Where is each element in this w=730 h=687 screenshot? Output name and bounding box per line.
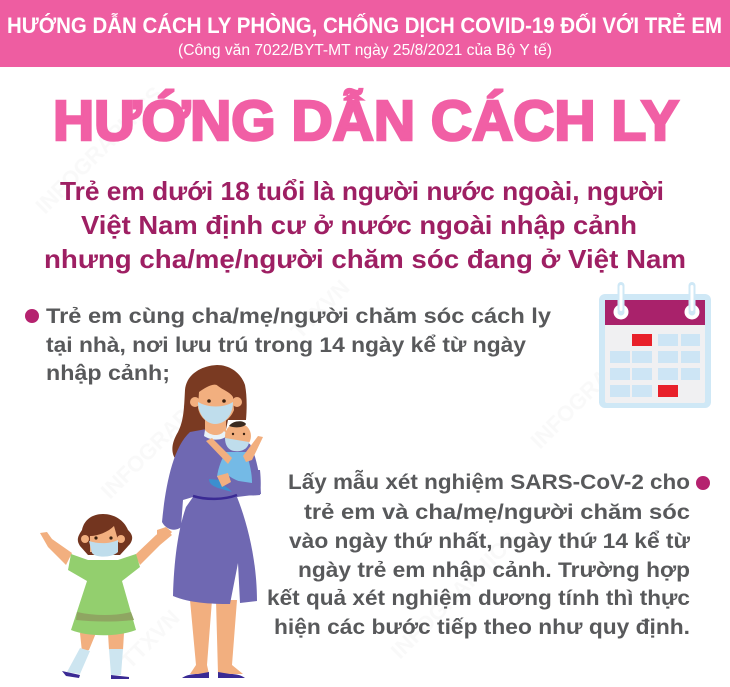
baby head <box>225 423 251 449</box>
baby mask <box>225 438 249 451</box>
bullet <box>696 476 710 490</box>
subtitle: Trẻ em dưới 18 tuổi là người nước ngoài, người <box>60 176 664 206</box>
hand <box>157 527 172 541</box>
text block: home isolation <box>25 305 551 385</box>
subtitle <box>44 176 686 274</box>
infographic: INFOGRAPHICS <box>96 367 233 504</box>
hair <box>172 365 247 496</box>
mask <box>89 540 118 557</box>
infographic: INFOGRAPHICS <box>526 317 663 454</box>
baby arms <box>206 436 263 464</box>
text block: home isolation: nhập cảnh; <box>46 362 170 385</box>
illustration: child <box>40 514 172 679</box>
bullet <box>25 309 39 323</box>
subtitle: nhưng cha/mẹ/người chăm sóc đang ở Việt Nam <box>44 244 686 274</box>
face <box>90 526 118 552</box>
dress <box>68 554 140 635</box>
neck and collar <box>205 418 226 436</box>
belt <box>193 495 237 499</box>
text block: testing: ngày trẻ em nhập cảnh. Trường hợp <box>298 559 690 582</box>
legs <box>190 600 243 674</box>
arms <box>40 532 72 565</box>
face <box>198 385 234 424</box>
mask <box>198 402 233 424</box>
belt <box>76 612 134 622</box>
mother's forearm <box>222 470 261 495</box>
text block: testing <box>267 470 710 639</box>
shoes <box>62 671 129 679</box>
subtitle: Việt Nam định cư ở nước ngoài nhập cảnh <box>81 210 637 240</box>
header source note: (Công văn 7022/BYT-MT ngày 25/8/2021 của Bộ Y tế) <box>178 42 552 59</box>
text block: home isolation: Trẻ em cùng cha/mẹ/người chăm sóc cách ly <box>46 305 551 328</box>
text block: testing: kết quả xét nghiệm dương tính thì thực <box>267 587 690 610</box>
text block: testing: hiện các bước tiếp theo như quy định. <box>274 616 690 639</box>
baby body <box>217 452 252 483</box>
infographic: INFOGRAPHICS <box>386 527 523 664</box>
hair <box>78 514 132 555</box>
icon: calendar <box>599 282 711 408</box>
dress <box>162 428 261 604</box>
infographic: INFOGRAPHICS <box>31 82 168 219</box>
main title: HƯỚNG DẪN CÁCH LY <box>53 88 679 153</box>
infographic: TTXVN <box>116 605 185 674</box>
text block: testing: vào ngày thứ nhất, ngày thứ 14 kể từ <box>289 530 691 553</box>
baby foot <box>209 479 232 492</box>
shoes <box>182 672 245 678</box>
text block: testing: Lấy mẫu xét nghiệm SARS-CoV-2 cho <box>288 470 690 494</box>
text block: testing: trẻ em và cha/mẹ/người chăm sóc <box>304 501 690 524</box>
illustration: mother holding baby <box>157 365 263 678</box>
infographic: TTXVN <box>286 275 355 344</box>
text block: home isolation: tại nhà, nơi lưu trú trong 14 ngày kể từ ngày <box>46 334 526 357</box>
header band <box>0 0 730 67</box>
socks <box>67 648 123 675</box>
legs <box>80 633 124 652</box>
